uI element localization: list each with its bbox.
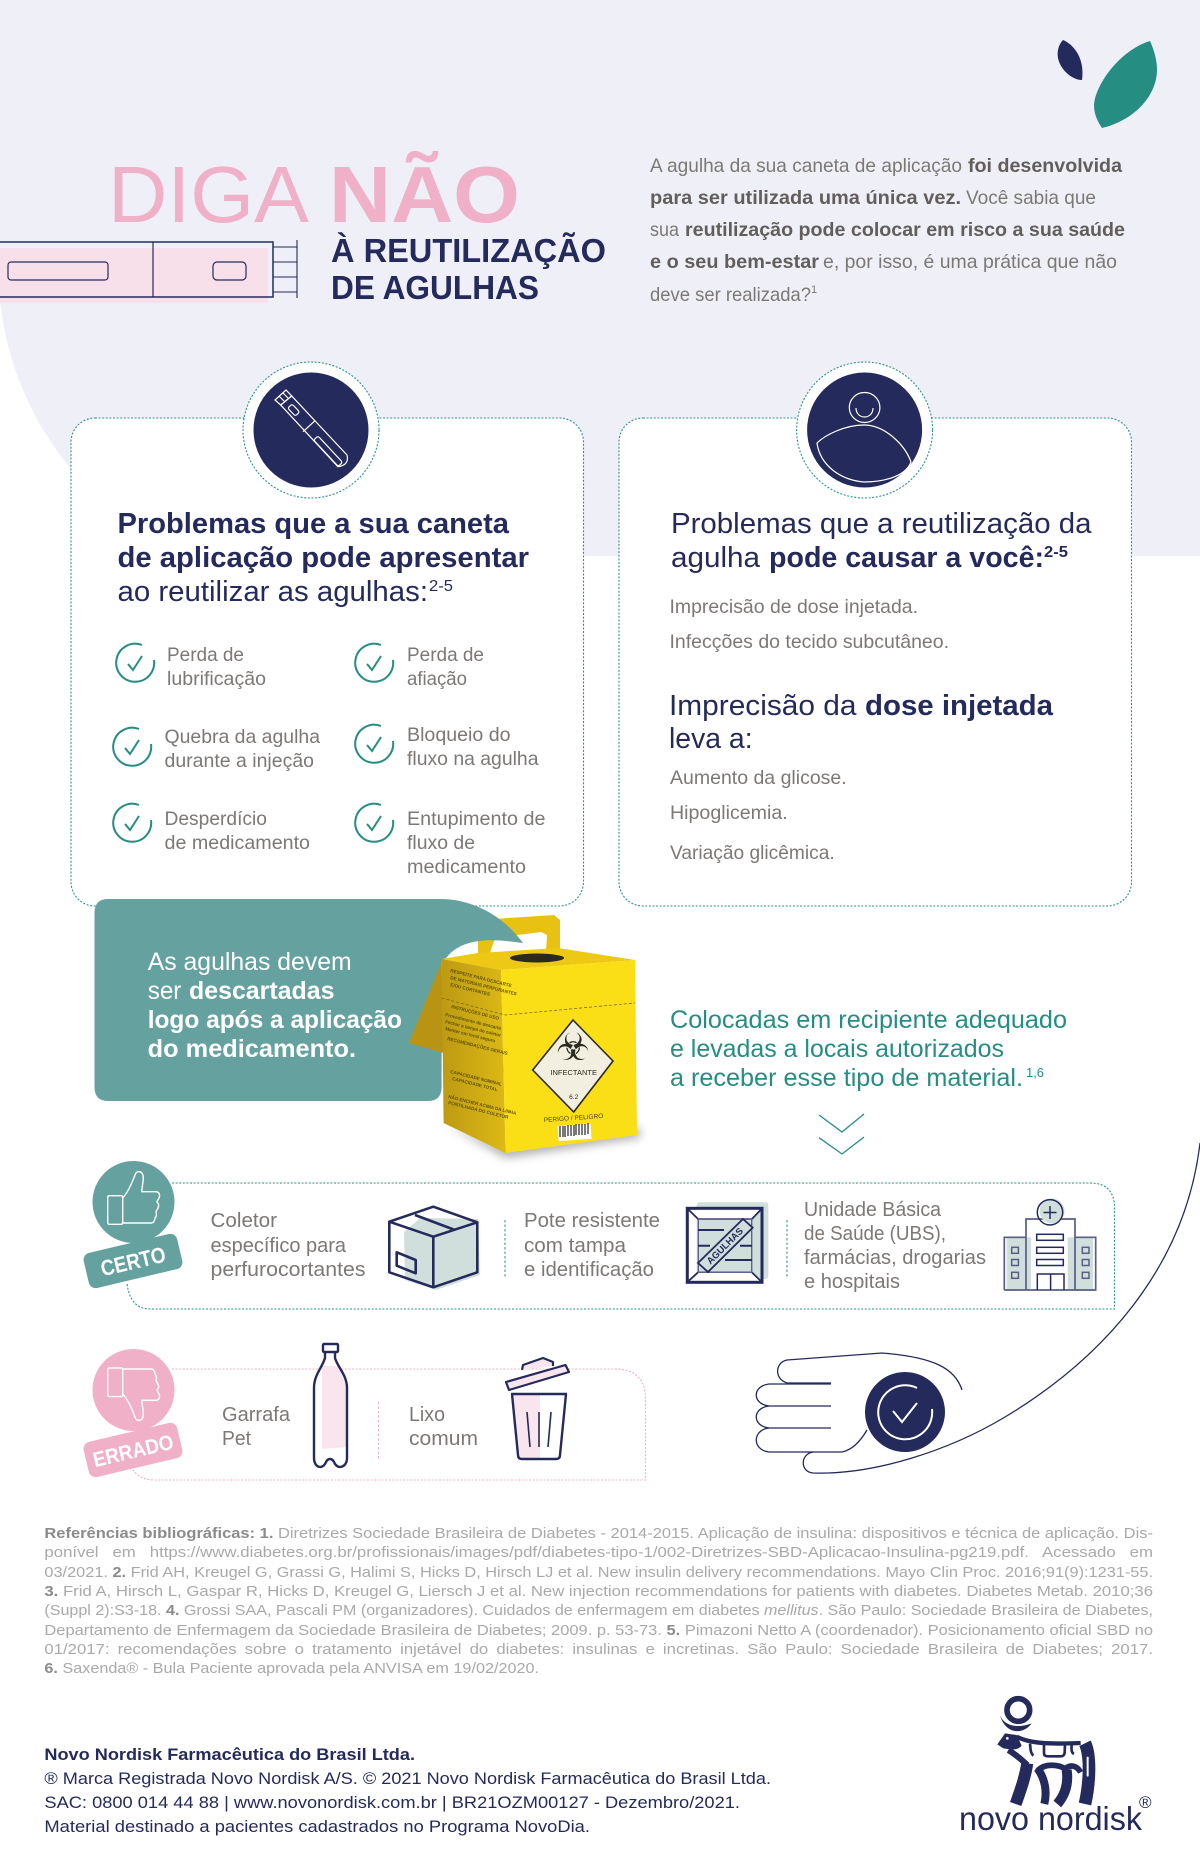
photo: sharps container: PERIGO / PELIGRO	[544, 1113, 604, 1124]
text: coletor	[210, 1209, 366, 1281]
list: direct effects: Infecções do tecido subcutâneo.	[670, 631, 949, 653]
intro paragraph: foi desenvolvida	[968, 155, 1122, 177]
photo: sharps container: INFECTANTE	[550, 1068, 597, 1077]
intro paragraph: para ser utilizada uma única vez.	[650, 187, 961, 209]
subtitle: À REUTILIZAÇÃO	[331, 232, 606, 269]
text: proper disposal: 1,6	[1026, 1065, 1044, 1080]
list: dose consequences: Hipoglicemia.	[670, 802, 788, 824]
text: company info	[44, 1745, 771, 1836]
icon: crate	[687, 1202, 768, 1282]
photo: sharps container: E/OU CORTANTES	[450, 982, 491, 997]
photo: sharps container: RECOMENDAÇÕES GERAIS	[447, 1035, 508, 1056]
photo: sharps container: Manter em local seguro	[445, 1026, 496, 1043]
panel: wrong disposal	[82, 1344, 645, 1480]
item: perda de afiação: Perda de	[407, 644, 484, 666]
text: coletor: específico para	[210, 1234, 347, 1257]
item: quebra da agulha: Quebra da agulha	[164, 726, 320, 748]
icon: bottle	[314, 1344, 347, 1467]
item: perda de lubrificação	[116, 644, 266, 690]
text: references: 01/2017: recomendações sobre o tratamento injetável do diabetes: insulinas e incretinas. São Paulo: Sociedade Brasileira de Diabetes; 2017.	[44, 1642, 1153, 1658]
icon: leaves	[1058, 40, 1157, 128]
icon: pen illustration	[0, 240, 297, 303]
panel: correct disposal	[82, 1161, 1115, 1309]
list: dose consequences	[670, 767, 847, 864]
text: proper disposal	[670, 1006, 1067, 1092]
title: DIGA	[108, 150, 310, 239]
text: unidade básica: e hospitais	[804, 1270, 900, 1293]
tag: certo: CERTO	[98, 1242, 168, 1281]
text: pote: e identificação	[524, 1258, 654, 1281]
heading: pen problems: 2-5	[429, 578, 453, 595]
panel: pen problems	[71, 362, 584, 906]
heading: pen problems: Problemas que a sua caneta	[118, 508, 510, 540]
tag: certo	[82, 1232, 184, 1290]
item: quebra da agulha	[113, 726, 320, 772]
photo: sharps container: CAPACIDADE TOTAL	[452, 1076, 498, 1092]
title: NÃO	[329, 150, 520, 239]
item: desperdício: Desperdício	[164, 808, 267, 830]
photo: sharps container: DE MATERIAIS PERFURANTES	[450, 975, 517, 997]
intro paragraph: deve ser realizada?	[650, 284, 811, 306]
logo: novo nordisk	[959, 1699, 1152, 1837]
item: desperdício: de medicamento	[164, 832, 310, 854]
icon: trash bin	[506, 1358, 569, 1459]
heading: pen problems	[118, 508, 529, 608]
list: direct effects	[670, 596, 949, 653]
heading: dose imprecision	[669, 690, 1054, 755]
logo: novo nordisk: novo nordisk	[959, 1800, 1142, 1837]
text: references: Referências bibliográficas: 1. Diretrizes Sociedade Brasileira de Diabetes - 2014-2015. Aplicação de insulina: dispositivos e técnica de aplicação. Dis-	[44, 1526, 1153, 1542]
subtitle	[331, 232, 606, 306]
text: coletor: perfurocortantes	[210, 1258, 366, 1281]
icon: person badge	[797, 362, 933, 498]
intro paragraph: Você sabia que	[966, 187, 1096, 209]
item: quebra da agulha: durante a injeção	[164, 750, 314, 772]
item: perda de lubrificação: lubrificação	[167, 668, 266, 690]
heading: problems for you	[671, 508, 1092, 574]
intro paragraph: reutilização pode colocar em risco a sua saúde	[685, 219, 1125, 241]
text: pote: Pote resistente	[524, 1209, 660, 1232]
arrow: chevrons down	[819, 1114, 864, 1154]
item: perda de lubrificação: Perda de	[167, 644, 244, 666]
list: direct effects: Imprecisão de dose injetada.	[670, 596, 918, 618]
intro paragraph: sua	[650, 219, 679, 241]
icon: hand with check	[756, 1143, 1200, 1473]
list: dose consequences: Variação glicêmica.	[670, 842, 835, 864]
text: references	[44, 1526, 1153, 1677]
photo: sharps container: 6.2	[569, 1094, 579, 1101]
text: references: 3. Frid A, Hirsch L, Gaspar R, Hicks D, Kreugel G, Liersch J et al. New injection recommendations for patients with diabetes. Diabetes Metab. 2010;36	[44, 1584, 1153, 1600]
callout: discard needles: do medicamento.	[148, 1035, 356, 1063]
photo: container handle	[478, 915, 560, 956]
subtitle: DE AGULHAS	[331, 269, 539, 306]
text: lixo comum	[409, 1403, 478, 1450]
text: lixo comum: comum	[409, 1427, 478, 1450]
intro paragraph: 1	[811, 284, 817, 296]
heading: problems for you: Problemas que a reutilização da	[671, 508, 1092, 540]
text: company info: ® Marca Registrada Novo Nordisk A/S. © 2021 Novo Nordisk Farmacêutica do Brasil Ltda.	[44, 1769, 771, 1788]
icon: crate: AGULHAS	[705, 1226, 746, 1267]
text: references: Departamento de Enfermagem da Sociedade Brasileira de Diabetes; 2009. p. 53-73. 5. Pimazoni Netto A (coordenador). Posicionamento oficial SBD no	[44, 1623, 1153, 1639]
text: pote	[524, 1209, 660, 1281]
item: entupimento: fluxo de	[407, 832, 475, 854]
heading: pen problems: ao reutilizar as agulhas:	[118, 576, 428, 608]
heading: dose imprecision: leva a:	[669, 723, 753, 755]
text: company info: Material destinado a pacientes cadastrados no Programa NovoDia.	[44, 1817, 590, 1836]
icon: thumbs up	[92, 1161, 174, 1243]
title	[108, 150, 520, 239]
callout: discard needles: logo após a aplicação	[148, 1006, 402, 1034]
heading: dose imprecision: Imprecisão da	[669, 690, 857, 722]
item: entupimento	[355, 804, 546, 878]
text: proper disposal: a receber esse tipo de material.	[670, 1064, 1023, 1092]
text: references: ponível em https://www.diabetes.org.br/profissionais/images/pdf/diabetes-tipo-1/002-Diretrizes-SBD-Aplicacao-Insulina-pg219.pdf. Acessado em	[44, 1545, 1153, 1561]
photo: sharps container	[409, 948, 640, 1157]
heading: dose imprecision: dose injetada	[865, 690, 1054, 722]
photo: sharps container: Fechar a tampa do coletor	[445, 1019, 502, 1038]
text: unidade básica: Unidade Básica	[804, 1198, 942, 1221]
item: bloqueio do fluxo: Bloqueio do	[407, 724, 511, 746]
text: garrafa pet: Pet	[222, 1427, 251, 1450]
photo: sharps container: INSTRUÇÕES DE USO	[451, 1003, 500, 1021]
tag: errado: ERRADO	[91, 1431, 176, 1472]
text: unidade básica: farmácias, drogarias	[804, 1246, 986, 1269]
callout: discard needles: ser	[148, 977, 181, 1005]
item: bloqueio do fluxo: fluxo na agulha	[407, 748, 539, 770]
item: perda de afiação: afiação	[407, 668, 467, 690]
photo: sharps container: CAPACIDADE NOMINAL	[450, 1069, 503, 1087]
text: company info: SAC: 0800 014 44 88 | www.novonordisk.com.br | BR21OZM00127 - Dezembro/2021.	[44, 1793, 740, 1812]
heading: problems for you: agulha	[671, 542, 761, 574]
photo: sharps container: NÃO ENCHER ACIMA DA LINHA	[448, 1093, 518, 1116]
text: unidade básica	[804, 1198, 986, 1293]
icon: thumbs down	[92, 1349, 174, 1431]
text: garrafa pet	[222, 1403, 291, 1450]
text: garrafa pet: Garrafa	[222, 1403, 291, 1426]
text: references: 6. Saxenda® - Bula Paciente aprovada pela ANVISA em 19/02/2020.	[44, 1661, 539, 1677]
tag: errado	[82, 1421, 184, 1479]
item: perda de afiação	[355, 644, 484, 690]
callout: discard needles	[94, 899, 523, 1101]
text: references: 03/2021. 2. Frid AH, Kreugel G, Grassi G, Halimi S, Hicks D, Hirsch LJ et al. New insulin delivery recommendations. Mayo Clin Proc. 2016;91(9):1231-55.	[44, 1565, 1153, 1581]
text: coletor: Coletor	[210, 1209, 277, 1232]
photo: sharps container: Procedimento de descarte	[445, 1012, 502, 1031]
text: pote: com tampa	[524, 1234, 627, 1257]
photo: sharps container: ☣	[556, 1025, 590, 1069]
icon: hospital	[1004, 1198, 1096, 1290]
logo: novo nordisk: ®	[1139, 1793, 1152, 1812]
text: unidade básica: de Saúde (UBS),	[804, 1222, 946, 1245]
text: company info: Novo Nordisk Farmacêutica do Brasil Ltda.	[44, 1745, 415, 1764]
text: proper disposal: Colocadas em recipiente adequado	[670, 1006, 1067, 1034]
item: bloqueio do fluxo	[355, 724, 539, 770]
heading: problems for you: 2-5	[1044, 544, 1068, 561]
item: entupimento: medicamento	[407, 856, 526, 878]
heading: problems for you: pode causar a você:	[769, 542, 1044, 574]
text: references: (Suppl 2):S3-18. 4. Grossi SAA, Pascali PM (organizadores). Cuidados de enfermagem em diabetes mellitus . São Paulo: Sociedade Brasileira de Diabetes,	[44, 1603, 1153, 1619]
list: dose consequences: Aumento da glicose.	[670, 767, 847, 789]
icon: pen badge	[243, 362, 379, 498]
icon: cardboard box	[389, 1207, 480, 1290]
intro paragraph: e, por isso, é uma prática que não	[823, 251, 1117, 273]
intro paragraph	[650, 155, 1125, 306]
callout: discard needles: As agulhas devem	[148, 948, 352, 976]
intro paragraph: A agulha da sua caneta de aplicação	[650, 155, 962, 177]
panel: problems for you	[619, 362, 1132, 906]
photo: sharps container: PONTILHADA DO COLETOR	[448, 1100, 510, 1120]
callout: discard needles: descartadas	[189, 977, 334, 1005]
photo: sharps container: RESPEITE PARA DESCARTE	[450, 968, 512, 988]
intro paragraph: e o seu bem-estar	[650, 251, 819, 273]
text: proper disposal: e levadas a locais autorizados	[670, 1035, 1004, 1063]
text: lixo comum: Lixo	[409, 1403, 445, 1426]
heading: pen problems: de aplicação pode apresentar	[118, 542, 529, 574]
item: entupimento: Entupimento de	[407, 808, 546, 830]
item: desperdício	[113, 804, 310, 854]
